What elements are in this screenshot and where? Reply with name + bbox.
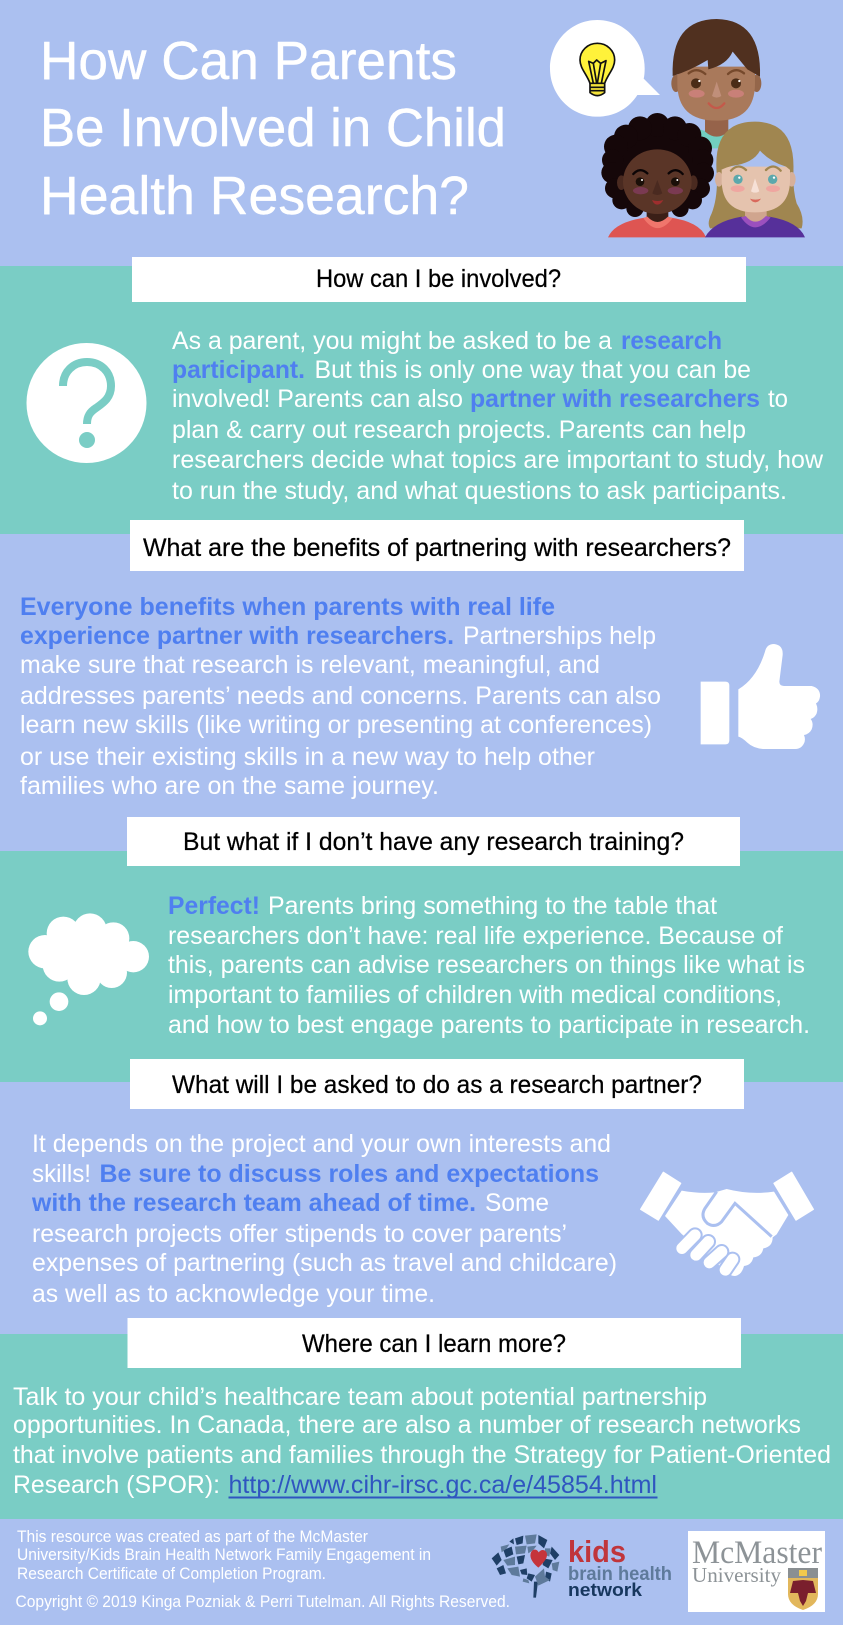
footer	[16, 1528, 825, 1612]
body text: Be sure to discuss roles and expectations	[100, 1160, 599, 1188]
body text: Talk to your child’s healthcare team about potential partnership	[13, 1383, 707, 1411]
body text: Some	[485, 1189, 549, 1217]
title: How Can Parents	[40, 31, 457, 91]
logo: kids brain health network: network	[568, 1579, 643, 1600]
heading box: How can I be involved?	[316, 265, 561, 293]
speech bubble	[550, 20, 660, 117]
heading box	[127, 817, 740, 866]
icon: thought cloud	[28, 913, 149, 1025]
icon: handshake	[641, 1172, 813, 1276]
body text: as well as to acknowledge your time.	[32, 1280, 435, 1308]
body text: to run the study, and what questions to ask participants.	[172, 477, 787, 505]
body text: with the research team ahead of time.	[31, 1189, 476, 1217]
body text	[168, 892, 810, 1039]
body text: Partnerships help	[463, 622, 656, 650]
logo: kids brain health network: brain health	[568, 1564, 672, 1585]
body text: that involve patients and families through the Strategy for Patient-Oriented	[13, 1441, 831, 1469]
credits text: Research Certificate of Completion Program.	[17, 1565, 326, 1583]
heading box	[130, 520, 744, 571]
credits text: This resource was created as part of the McMaster	[17, 1528, 368, 1546]
panel: what will I be asked to do	[31, 1059, 813, 1308]
panel: no research training	[0, 817, 843, 1082]
person: blonde parent	[705, 122, 805, 237]
body text: As a parent, you might be asked to be a	[172, 327, 612, 355]
body text: But this is only one way that you can be	[314, 356, 751, 384]
illustration: three parents with lightbulb speech bubble	[550, 19, 805, 237]
heading box: Where can I learn more?	[302, 1330, 566, 1358]
heading box: What will I be asked to do as a research partner?	[172, 1071, 702, 1099]
body text: Research (SPOR):	[13, 1471, 220, 1499]
body text	[20, 593, 661, 800]
body text: Everyone benefits when parents with real life	[20, 593, 555, 621]
logo: McMaster University: University	[692, 1563, 782, 1587]
body text: skills!	[32, 1160, 91, 1188]
body text: plan & carry out research projects. Parents can help	[172, 416, 746, 444]
heading box: What are the benefits of partnering with researchers?	[143, 534, 731, 562]
body text: researchers don’t have: real life experience. Because of	[168, 922, 783, 950]
logo: McMaster University: McMaster	[692, 1535, 822, 1571]
body text: research	[621, 327, 722, 355]
panel background	[0, 851, 843, 1082]
body text: researchers decide what topics are important to study, how	[172, 446, 824, 474]
logo: kids brain health network	[492, 1534, 672, 1600]
icon: thumbs up	[701, 644, 820, 749]
body text: and how to best engage parents to participate in research.	[168, 1011, 810, 1039]
panel: benefits of partnering	[20, 520, 820, 800]
body text	[172, 327, 824, 505]
body text: involved! Parents can also	[172, 385, 463, 413]
title: Health Research?	[40, 166, 469, 226]
person: boy	[671, 19, 761, 148]
heading box: But what if I don’t have any research training?	[183, 828, 684, 856]
body text	[31, 1130, 617, 1308]
body text: expenses of partnering (such as travel and childcare)	[32, 1249, 617, 1277]
body text: participant.	[172, 356, 305, 384]
heading box	[128, 1318, 741, 1368]
body text: Perfect!	[168, 892, 260, 920]
body text: opportunities. In Canada, there are also a number of research networks	[13, 1411, 801, 1439]
body text: important to families of children with medical conditions,	[168, 981, 782, 1009]
body text	[13, 1383, 831, 1499]
panel background	[0, 1334, 843, 1519]
title: Be Involved in Child	[40, 98, 506, 158]
credits text	[16, 1528, 510, 1611]
crest	[788, 1568, 818, 1610]
body text: It depends on the project and your own interests and	[32, 1130, 611, 1158]
body text: make sure that research is relevant, meaningful, and	[20, 651, 600, 679]
link: http://www.cihr-irsc.gc.ca/e/45854.html	[228, 1471, 657, 1499]
panel: where can I learn more	[0, 1318, 843, 1519]
logo: McMaster University	[688, 1531, 825, 1612]
body text: families who are on the same journey.	[20, 772, 439, 800]
body text: partner with researchers	[470, 385, 760, 413]
icon: question mark	[26, 343, 146, 463]
body text: research projects offer stipends to cover parents’	[32, 1220, 567, 1248]
body text: addresses parents’ needs and concerns. Parents can also	[20, 682, 661, 710]
body text: to	[768, 385, 788, 413]
heading box	[130, 1059, 744, 1109]
body text: Parents bring something to the table that	[268, 892, 717, 920]
panel: how can I be involved	[0, 257, 843, 534]
body text: this, parents can advise researchers on things like what is	[168, 951, 805, 979]
title	[40, 31, 506, 226]
logo: kids brain health network: kids	[568, 1534, 626, 1569]
heading box	[132, 257, 746, 302]
body text: learn new skills (like writing or presenting at conferences)	[20, 711, 652, 739]
icon: lightbulb	[580, 43, 615, 96]
person: dark curly-haired parent	[601, 113, 714, 237]
credits text: Copyright © 2019 Kinga Pozniak & Perri Tutelman. All Rights Reserved.	[16, 1593, 510, 1611]
body text: or use their existing skills in a new way to help other	[20, 743, 595, 771]
body text: experience partner with researchers.	[20, 622, 454, 650]
panel background	[0, 266, 843, 534]
credits text: University/Kids Brain Health Network Family Engagement in	[17, 1546, 431, 1564]
